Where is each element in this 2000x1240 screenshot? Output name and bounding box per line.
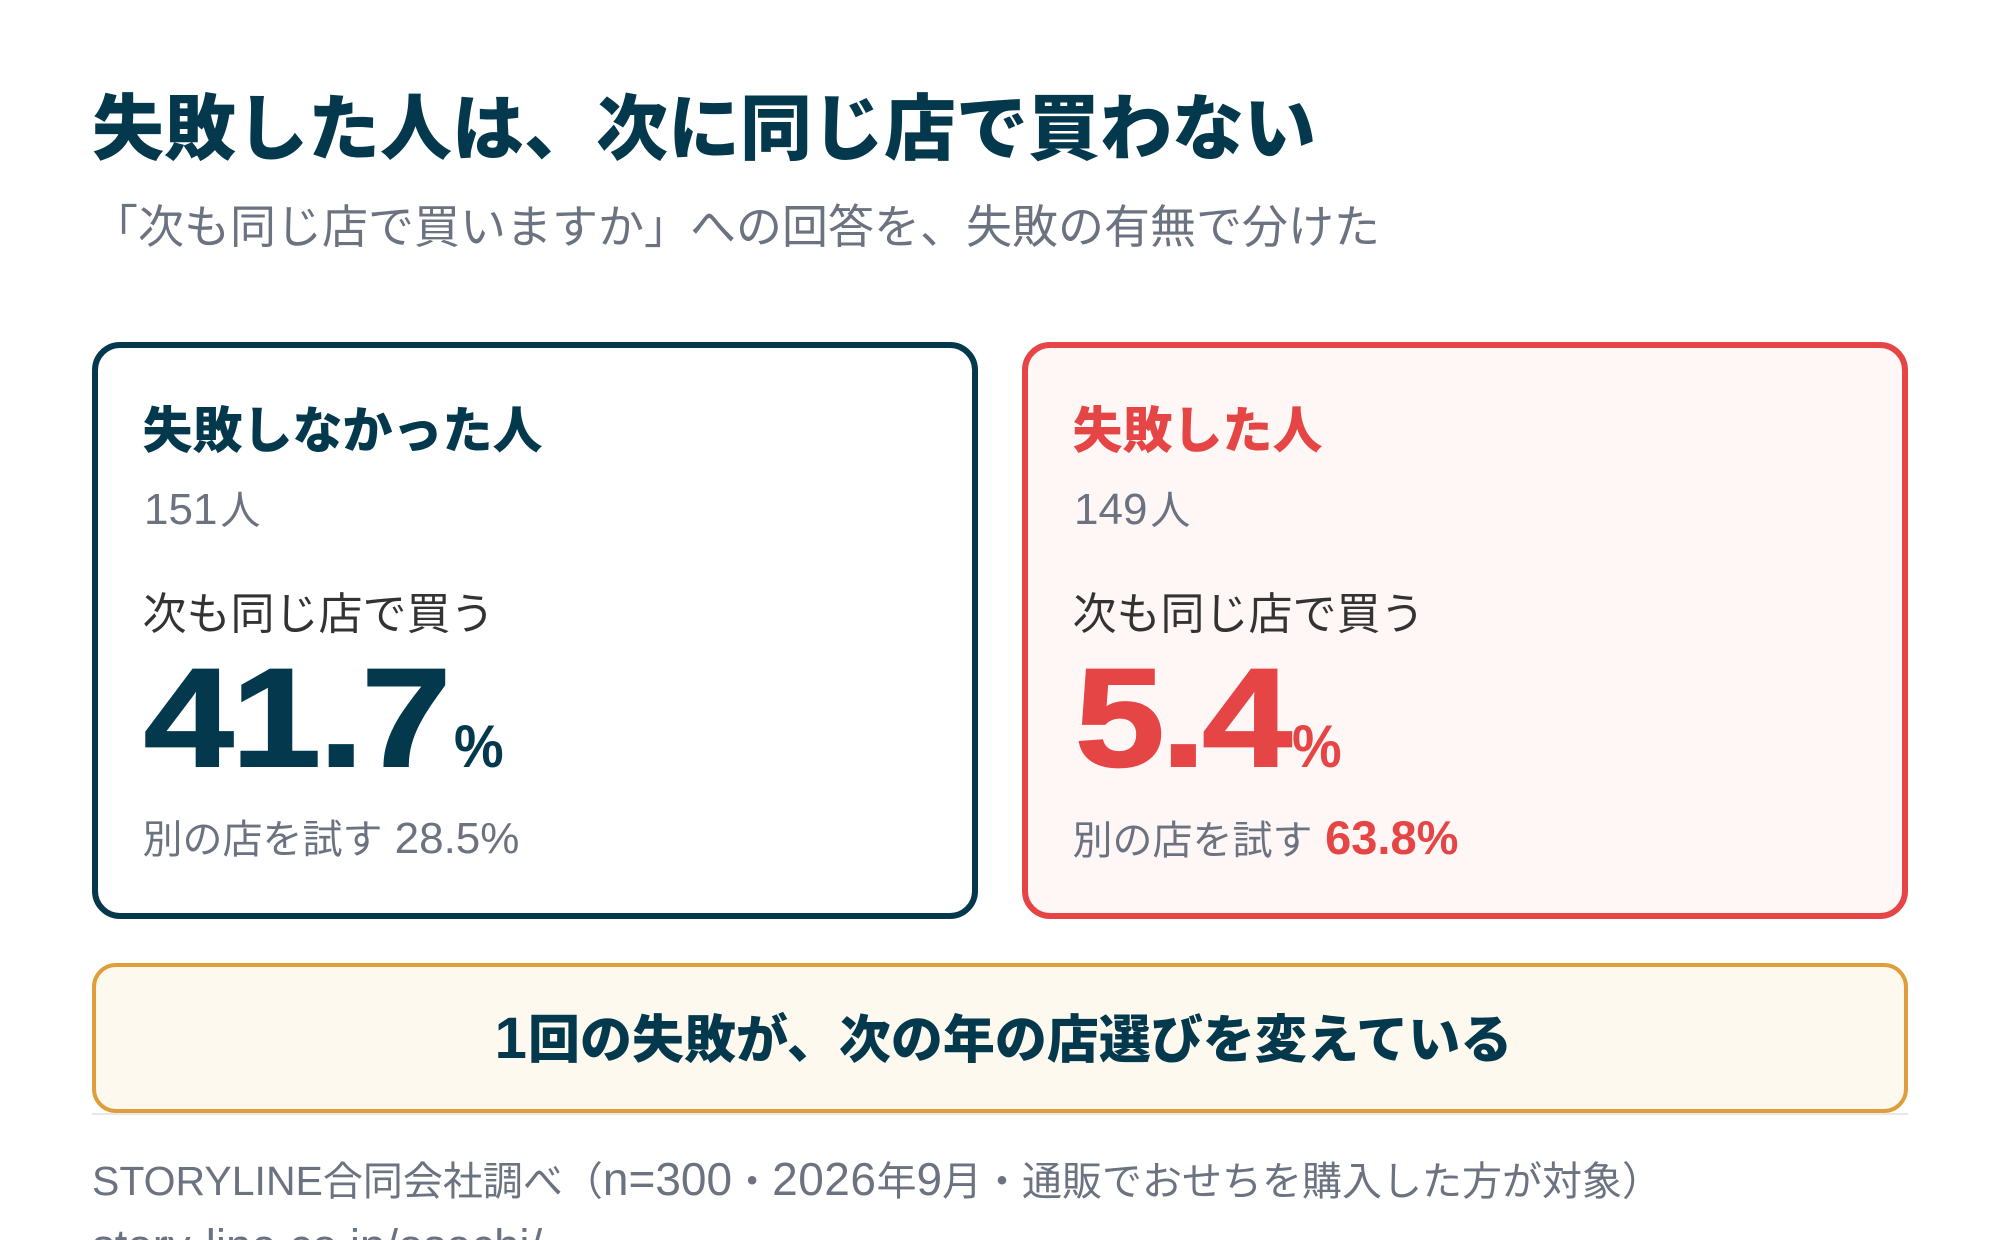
panel heading: 失敗した人 — [1072, 402, 1322, 458]
metric label: 次も同じ店で買う — [1072, 590, 1424, 639]
respondent count: 149人 — [1074, 485, 1190, 534]
respondent count: 151人 — [144, 485, 260, 534]
source note: STORYLINE合同会社調べ（n=300・2026年9月・通販でおせちを購入した方が対象） — [92, 1153, 1662, 1205]
title: 失敗した人は、次に同じ店で買わない — [92, 90, 1316, 170]
switch rate: 別の店を試す 63.8% — [1072, 811, 1458, 864]
panel: people who failed — [1022, 342, 1908, 919]
panel: people who did not fail — [92, 342, 978, 919]
source note — [92, 1153, 1662, 1240]
percent sign: % — [1292, 713, 1342, 780]
callout banner — [92, 963, 1908, 1113]
callout banner: 1回の失敗が、次の年の店選びを変えている — [495, 1006, 1512, 1071]
big percentage: 5.4 — [1075, 639, 1288, 796]
switch rate: 別の店を試す 28.5% — [142, 814, 519, 863]
big percentage: 41.7 — [144, 639, 449, 796]
subtitle: 「次も同じ店で買いますか」への回答を、失敗の有無で分けた — [92, 201, 1380, 253]
panel heading: 失敗しなかった人 — [142, 402, 542, 458]
percent sign: % — [454, 713, 504, 780]
metric label: 次も同じ店で買う — [142, 590, 494, 639]
